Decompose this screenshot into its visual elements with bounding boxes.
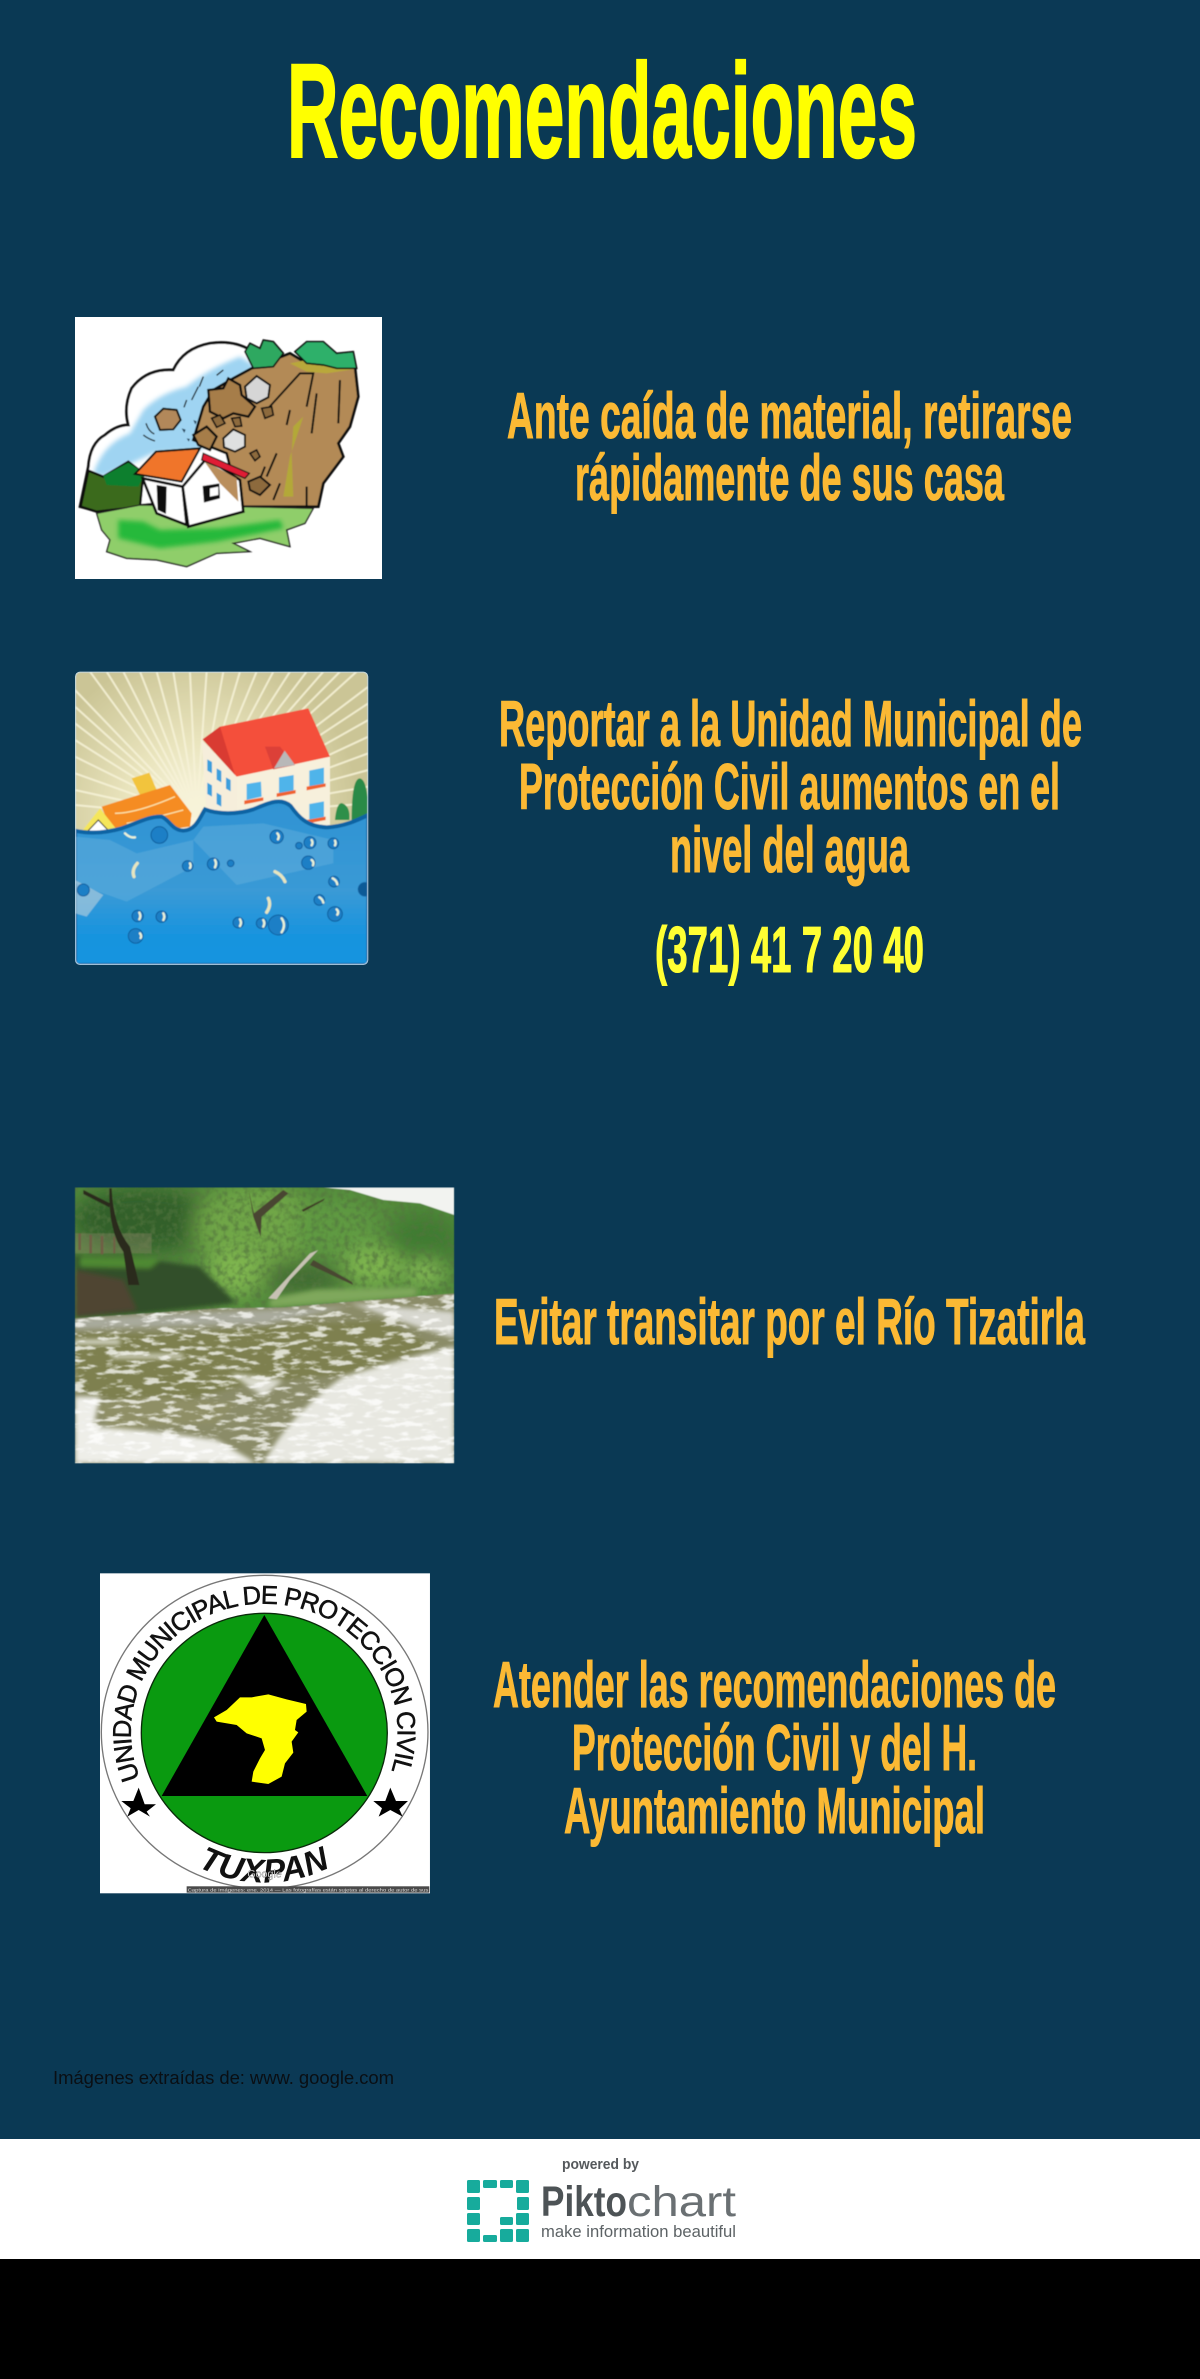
ground	[97, 505, 313, 567]
big house	[202, 742, 236, 809]
phone number: (371) 41 7 20 40	[655, 913, 924, 986]
trees	[335, 803, 349, 820]
fence	[75, 1233, 152, 1253]
small sunken house	[132, 773, 157, 795]
distant hills	[81, 462, 143, 512]
logo: Unidad Municipal de Protección Civil Tuxpan: Captura de imágenes: ene. 2014 — Las fotografías están sujetas al derecho de autor de sus	[188, 1887, 429, 1893]
logo: Unidad Municipal de Protección Civil Tuxpan	[100, 1573, 430, 1894]
illustration: falling rocks over a house	[75, 317, 382, 579]
illustration: flooded houses	[75, 672, 372, 965]
footer: powered by Piktochart: powered by	[562, 2156, 640, 2173]
tree trunks and branches	[109, 1188, 139, 1285]
recommendation 4 text	[493, 1648, 1056, 1847]
rocks	[208, 378, 255, 418]
trees	[70, 1183, 460, 1321]
black bottom band	[0, 2259, 1200, 2379]
yellow municipality map	[214, 1694, 307, 1784]
grass on cliff top	[245, 340, 283, 368]
photo: Río Tizatirla	[70, 1183, 460, 1465]
house walls	[143, 478, 187, 525]
footer: powered by Piktochart: chart	[627, 2178, 736, 2226]
footer: powered by Piktochart	[0, 2139, 1200, 2259]
ring lettering	[131, 1604, 398, 1778]
map attribution strip	[187, 1886, 429, 1893]
green disc	[141, 1613, 387, 1853]
recommendation 1 text	[507, 379, 1072, 514]
recommendation 2 text	[499, 687, 1082, 886]
sky	[323, 1187, 454, 1215]
earth bank	[75, 1255, 417, 1318]
footer: powered by Piktochart: Pikto	[541, 2178, 627, 2226]
roof	[135, 448, 200, 482]
logo: Unidad Municipal de Protección Civil Tuxpan: Google	[247, 1869, 282, 1881]
icon: Piktochart logo	[467, 2180, 529, 2242]
bubbles	[77, 827, 372, 943]
reflection	[75, 823, 333, 902]
river	[75, 1292, 454, 1465]
cliff	[193, 353, 358, 507]
logo: Unidad Municipal de Protección Civil Tuxpan: TUXPAN	[203, 1846, 328, 1883]
sky cloud shape	[80, 342, 293, 510]
image credit: Imágenes extraídas de: www. google.com	[53, 2067, 394, 2088]
recommendation 2 text: nivel del agua	[670, 813, 909, 886]
logo: Unidad Municipal de Protección Civil Tuxpan: UNIDAD MUNICIPAL DE PROTECCION CIVIL	[112, 1586, 416, 1782]
black triangle	[162, 1615, 367, 1796]
stars	[121, 1788, 156, 1817]
sun rays	[75, 672, 368, 817]
footer: powered by Piktochart: make information beautiful	[541, 2223, 736, 2241]
water	[75, 802, 368, 965]
